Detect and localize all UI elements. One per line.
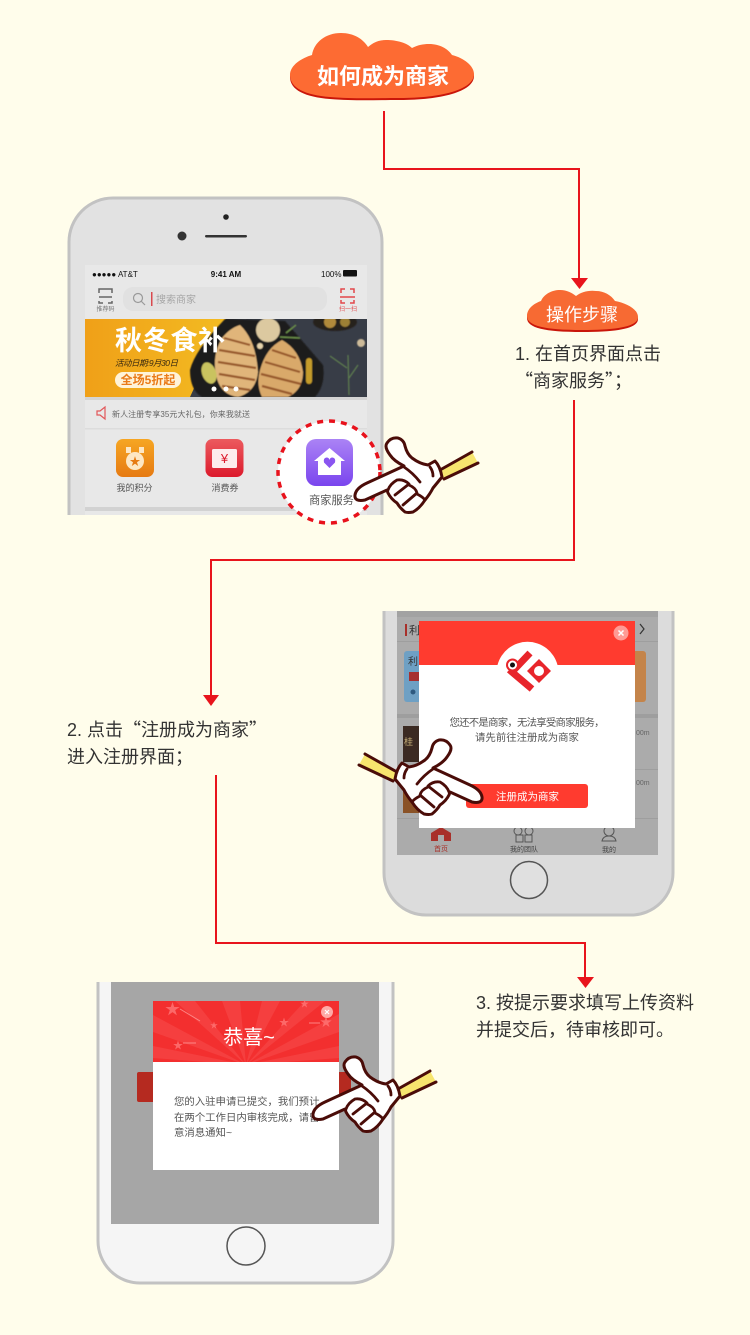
step 2 text — [67, 716, 267, 769]
dimmed screen: 00m — [636, 730, 650, 737]
title cloud — [290, 33, 474, 100]
status bar — [92, 270, 357, 277]
icon: coupon — [206, 439, 244, 493]
hand pointer 2 — [359, 740, 482, 814]
arrow: step 1 to step 2 — [203, 400, 574, 706]
modal message: 在两个工作日内审核完成，请留 — [174, 1111, 319, 1124]
banner date: 活动日期:9月30日 — [115, 358, 178, 368]
stars: ★ — [279, 1018, 289, 1029]
dimmed screen: 桂 — [404, 736, 413, 747]
step 3 text: 并提交后，待审核即可。 — [476, 1016, 674, 1042]
icon: points: ★ — [130, 456, 140, 468]
stars — [165, 999, 332, 1052]
close button — [321, 1006, 333, 1018]
sunburst — [153, 1001, 339, 1065]
title text: 如何成为商家 — [317, 64, 449, 89]
step 3 text: 3. 按提示要求填写上传资料 — [476, 993, 694, 1013]
screen — [85, 265, 367, 515]
dimmed button — [137, 1072, 351, 1102]
dimmed screen: 利 — [409, 624, 420, 637]
register button — [466, 784, 588, 808]
cloud label: 操作步骤 — [546, 305, 618, 325]
step 1 text: 1. 在首页界面点击 — [515, 344, 661, 364]
modal message: 意消息通知~ — [174, 1126, 232, 1139]
modal message: 您还不是商家，无法享受商家服务， — [450, 716, 604, 729]
phone 3: submitted — [96, 982, 394, 1284]
phone 2: register prompt — [382, 611, 674, 916]
merchant service highlight: 商家服务 — [309, 493, 354, 507]
modal: congratulations — [153, 999, 339, 1170]
step 2 text: 2. 点击“注册成为商家” — [67, 716, 267, 742]
modal title: 恭喜~ — [223, 1026, 275, 1049]
notice row — [97, 407, 250, 419]
stars: ★ — [320, 1015, 332, 1029]
search bar: 搜索商家 — [156, 293, 196, 306]
step 2 text: 进入注册界面； — [67, 743, 193, 769]
modal message: 请先前往注册成为商家 — [475, 731, 580, 744]
hand pointer 1 — [355, 438, 478, 512]
dimmed screen: 00m — [636, 780, 650, 787]
scan icon left — [96, 289, 115, 313]
label: points: 我的积分 — [116, 482, 153, 493]
search bar — [132, 292, 196, 306]
modal message — [174, 1095, 319, 1139]
tab bar: 首页 — [434, 844, 448, 853]
status bar: 9:41 AM — [211, 270, 242, 279]
step 1 text: “商家服务”； — [515, 367, 632, 393]
register button: 注册成为商家 — [496, 790, 559, 803]
modal message: 您的入驻申请已提交，我们预计 — [174, 1095, 319, 1108]
step 3 text — [476, 993, 694, 1042]
modal logo — [506, 653, 551, 689]
tab bar — [431, 828, 617, 853]
home button — [510, 862, 548, 898]
front camera and speaker — [178, 214, 247, 240]
dimmed screen — [111, 982, 379, 1224]
modal: register — [419, 621, 635, 828]
banner pill: 全场5折起 — [121, 372, 175, 387]
stars: ★ — [173, 1041, 183, 1052]
icon: points — [116, 439, 154, 493]
merchant service highlight — [278, 421, 380, 523]
banner — [85, 313, 367, 397]
stars: ★ — [165, 1001, 180, 1018]
scan icon right — [339, 289, 357, 313]
stars: ★ — [210, 1021, 218, 1030]
dimmed screen — [397, 611, 658, 855]
tab bar: 我的团队 — [510, 844, 538, 854]
label: coupon: 消费券 — [211, 482, 239, 493]
status bar: ●●●●● AT&T — [92, 270, 138, 279]
hand pointer 3 — [313, 1057, 436, 1132]
icon: coupon: ¥ — [220, 451, 229, 466]
pan and chicken — [190, 313, 365, 397]
notice row: 新人注册专享35元大礼包，你来我就送 — [112, 409, 250, 419]
stars: ★ — [300, 999, 309, 1009]
tab bar: 我的 — [602, 845, 616, 854]
arrow: step 2 to step 3 — [216, 775, 594, 988]
close button — [614, 626, 628, 640]
phone 1: home screen — [68, 196, 384, 515]
arrow: title to steps — [384, 111, 588, 289]
dimmed screen: 利 — [408, 656, 418, 668]
scan icon left: 推荐码 — [96, 305, 115, 313]
cloud: steps — [527, 290, 638, 332]
step 1 text — [515, 344, 661, 393]
banner title: 秋冬食补 — [115, 326, 225, 356]
status bar: 100% — [321, 270, 341, 279]
modal message — [450, 716, 604, 744]
scan icon right: 扫一扫 — [339, 305, 357, 313]
home button — [227, 1227, 265, 1265]
